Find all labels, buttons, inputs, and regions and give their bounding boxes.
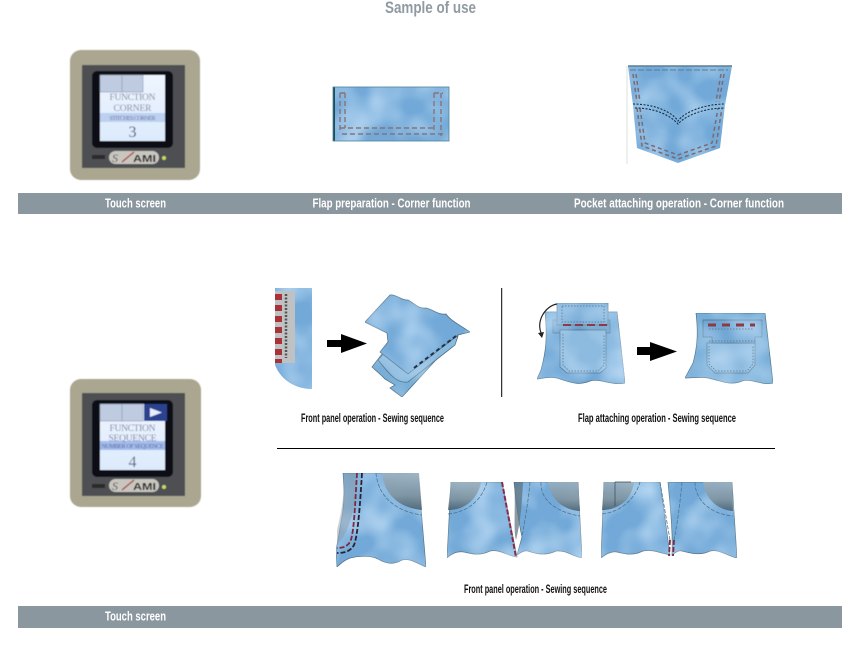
caption bar: bottom row	[18, 606, 842, 628]
image: front panel step 3	[601, 482, 737, 558]
image: front panel step 2	[447, 482, 582, 558]
label: touch screen: Touch screen	[105, 196, 166, 210]
divider: horizontal	[277, 448, 775, 450]
caption: front panel sequence: Front panel operation - Sewing sequence	[301, 413, 444, 425]
label: flap preparation: Flap preparation - Corner function	[312, 196, 470, 210]
icon: touch screen sequence function: NUMBER OF SEQUENCE	[102, 444, 164, 450]
arrow: flap attaching	[637, 342, 677, 361]
image: front panel step 1	[336, 473, 426, 567]
image: pocket with corner stitching	[627, 66, 732, 164]
icon: touch screen sequence function: AMI	[133, 481, 156, 493]
icon: touch screen corner function	[70, 50, 200, 180]
icon: touch screen corner function: CORNER	[114, 104, 152, 114]
image: flap with corner stitching	[333, 87, 449, 141]
caption bar: top row	[18, 193, 842, 214]
icon: touch screen corner function: S	[112, 151, 118, 165]
image: flap after attaching	[685, 313, 773, 384]
icon: touch screen sequence function: S	[112, 479, 118, 493]
icon: touch screen sequence function: SEQUENCE	[108, 434, 157, 444]
icon: touch screen corner function: 3	[128, 124, 136, 141]
arrow: front panel	[327, 334, 367, 353]
image: flap before attaching	[537, 303, 625, 384]
icon: touch screen corner function: FUNCTION	[110, 93, 156, 103]
image: folded front panel	[365, 295, 470, 397]
icon: touch screen corner function: STITCHES CORNER	[110, 116, 156, 122]
arrow: curved fold	[538, 304, 557, 338]
divider: vertical	[501, 288, 503, 397]
icon: touch screen sequence function: FUNCTION	[110, 424, 156, 434]
label: pocket attaching: Pocket attaching operation - Corner function	[574, 196, 784, 210]
caption: front panel sequence lower: Front panel operation - Sewing sequence	[464, 584, 607, 596]
caption: flap attaching sequence: Flap attaching operation - Sewing sequence	[578, 413, 736, 425]
icon: touch screen sequence function	[70, 379, 201, 507]
icon: touch screen corner function: AMI	[133, 153, 156, 165]
image: front panel stitching detail	[275, 288, 312, 389]
label: touch screen: Touch screen	[105, 610, 166, 624]
icon: touch screen sequence function: 4	[128, 454, 136, 471]
